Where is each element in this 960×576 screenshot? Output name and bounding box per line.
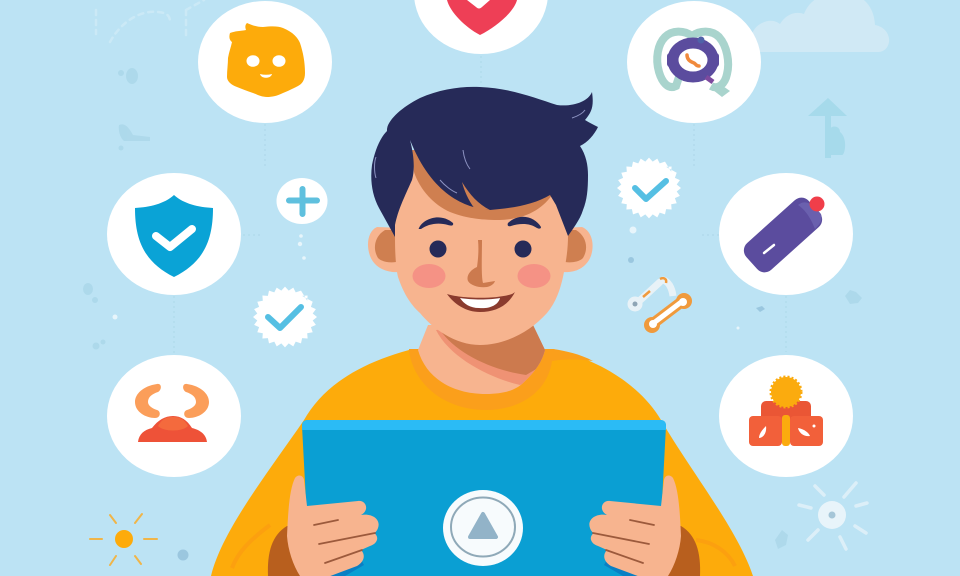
person <box>211 87 753 576</box>
face <box>395 150 568 345</box>
dotted connector lines <box>174 56 786 355</box>
cheeks <box>412 264 446 288</box>
white dots <box>112 226 740 330</box>
hair <box>371 87 598 237</box>
forehead hair shadow <box>412 150 552 220</box>
icon: plus badge <box>276 178 328 224</box>
eyebrows <box>419 217 541 229</box>
nose <box>467 240 495 287</box>
icon: gift badge <box>719 355 853 477</box>
eyes <box>430 240 446 258</box>
sweater <box>211 349 753 576</box>
icon: top heart badge <box>414 0 548 54</box>
icon: magnifier badge <box>627 1 761 123</box>
icon: shield badge <box>107 173 241 295</box>
icon: check badge right <box>617 158 681 218</box>
icon: telephone badge <box>107 355 241 477</box>
mouth <box>447 292 515 312</box>
left sleeve cuff <box>268 526 300 576</box>
icon: check badge left <box>253 287 317 347</box>
tablet button <box>443 490 523 566</box>
hair shine <box>374 110 585 193</box>
tablet hand shadows <box>325 558 643 576</box>
neck <box>418 325 545 394</box>
cloud <box>750 0 889 52</box>
sweater folds <box>232 525 735 568</box>
icon: yellow sun <box>90 514 157 565</box>
tablet <box>302 420 666 576</box>
icon: bone and chain <box>628 278 692 333</box>
icon: USB stick badge <box>719 173 853 295</box>
icon: pale sun <box>799 483 867 549</box>
right sleeve cuff <box>668 526 700 576</box>
right hand <box>589 476 681 576</box>
icon: smiling face badge <box>198 1 332 123</box>
tablet top edge <box>302 420 666 430</box>
decorative up arrow <box>808 98 847 158</box>
hair fringe highlight <box>462 182 490 210</box>
left ear <box>368 227 400 272</box>
teeth <box>460 298 500 308</box>
top-left dashed arc <box>96 0 204 42</box>
neck shadows <box>436 326 545 385</box>
faded blobs <box>83 68 862 560</box>
left hand <box>287 476 379 576</box>
sweater collar <box>409 349 593 410</box>
right ear <box>562 227 593 272</box>
